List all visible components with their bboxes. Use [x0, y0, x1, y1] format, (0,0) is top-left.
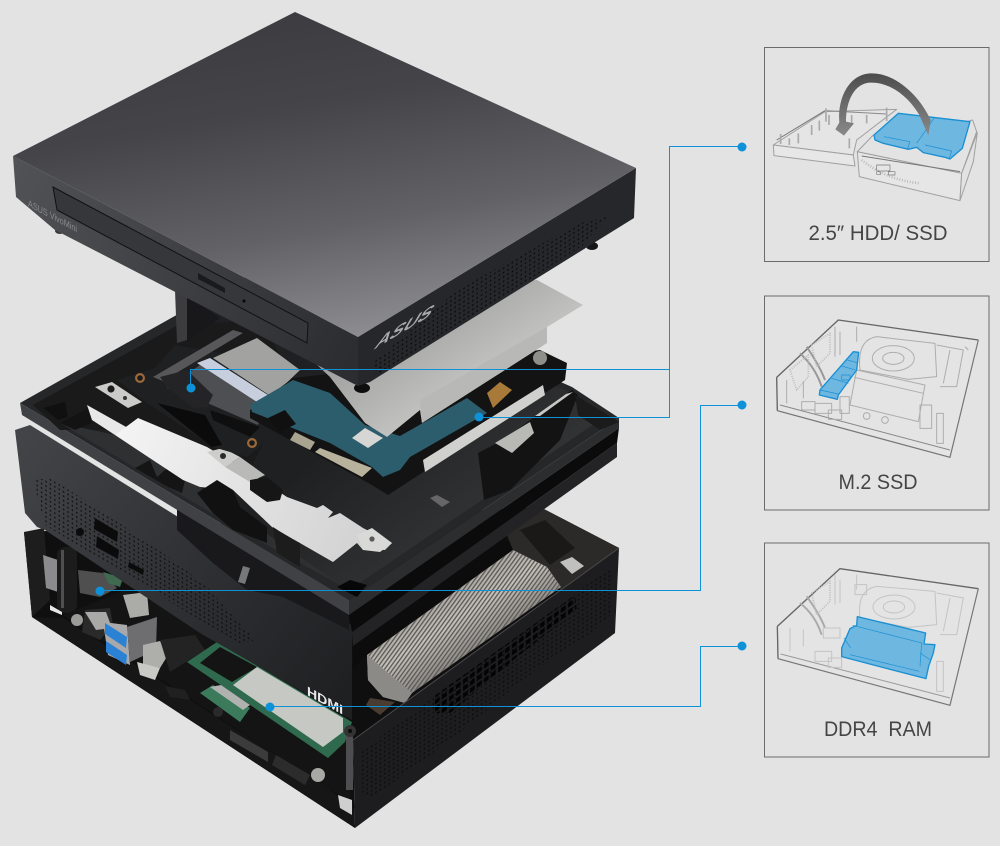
tray left side	[20, 403, 349, 615]
connector rail	[153, 330, 243, 381]
wall vent grid	[433, 595, 577, 713]
flex cable	[487, 382, 512, 408]
panel: M.2 SSD	[764, 296, 989, 510]
HDD bracket plate	[280, 280, 583, 437]
panel frame	[764, 543, 989, 757]
small green riser	[200, 685, 250, 722]
panel frame	[764, 296, 989, 510]
motherboard	[63, 590, 352, 800]
green module board	[187, 642, 352, 758]
HDD circuit board	[250, 380, 487, 477]
lower chassis interior	[24, 507, 619, 828]
band behind heatsink	[353, 532, 515, 668]
lid left face	[13, 156, 358, 386]
bottom board parts	[165, 686, 356, 815]
wall perforations	[360, 568, 610, 798]
spindle	[533, 351, 547, 365]
SATA connectors	[268, 410, 372, 477]
panel label: 2.5″ HDD/ SSD	[808, 222, 948, 245]
curved arrow	[835, 73, 931, 136]
panel label: DDR4 RAM	[824, 718, 932, 741]
tray floor	[33, 272, 600, 590]
SSD label	[233, 667, 343, 747]
blue RAM highlight	[842, 617, 935, 679]
product: lower chassis	[24, 507, 619, 828]
lower chassis right wall	[353, 548, 619, 828]
front rim	[32, 617, 355, 828]
heatsink	[367, 550, 561, 703]
product: top lid	[13, 12, 636, 393]
panel label: M.2 SSD	[838, 471, 918, 494]
HDMI marking: HDMI	[307, 683, 343, 718]
M.2 bay board	[95, 330, 300, 457]
callout leader: 2.5 inch HDD/SSD	[186, 142, 746, 422]
tray top rim	[20, 258, 619, 600]
I/O cutouts	[76, 518, 250, 584]
panel frame	[764, 48, 989, 262]
silver SSD shield	[213, 338, 300, 397]
HDD silver strip	[423, 385, 545, 472]
lid feet	[55, 228, 598, 393]
gray SSD module	[167, 365, 268, 425]
left tray blocks	[43, 402, 185, 493]
blue-gray label	[197, 358, 268, 402]
lid perforations	[373, 217, 607, 375]
screw plate	[95, 382, 142, 408]
HDD black base	[250, 350, 567, 495]
brand text: ASUS VivoMini	[28, 199, 77, 235]
copper screws	[135, 373, 145, 383]
left wall, panel and post	[24, 528, 123, 617]
rear support	[175, 290, 220, 343]
rear ports	[71, 592, 205, 680]
front-left face	[15, 425, 352, 720]
glossy curved accent	[177, 505, 349, 630]
rear compartment	[505, 507, 619, 590]
callout leader: M.2 SSD	[96, 400, 746, 596]
blue M.2 highlight	[819, 352, 859, 399]
right side cage	[478, 390, 619, 500]
illustration: HDD bay with lid flipped open	[773, 73, 977, 201]
silver shield plate	[115, 418, 392, 562]
face perforations	[33, 478, 255, 645]
panel: 2.5 inch HDD/SSD	[764, 48, 989, 262]
panel: DDR4 RAM	[764, 543, 989, 757]
shield fittings	[197, 448, 450, 597]
lid right face	[358, 168, 636, 386]
blue drive bay highlight	[874, 113, 970, 159]
bay details	[198, 273, 246, 303]
M.2 module	[187, 642, 352, 758]
lid top surface	[13, 12, 636, 337]
illustration: chassis with M.2 slot	[777, 320, 978, 457]
optical bay recess	[53, 187, 308, 343]
callout leader: DDR4 RAM	[266, 642, 746, 712]
black chips	[160, 370, 213, 408]
tray right edges	[349, 418, 619, 615]
illustration: chassis with RAM slot	[777, 569, 978, 705]
ASUS logo: ASUS	[370, 298, 440, 354]
product: middle tray	[15, 258, 619, 720]
SSD chip	[200, 647, 257, 682]
